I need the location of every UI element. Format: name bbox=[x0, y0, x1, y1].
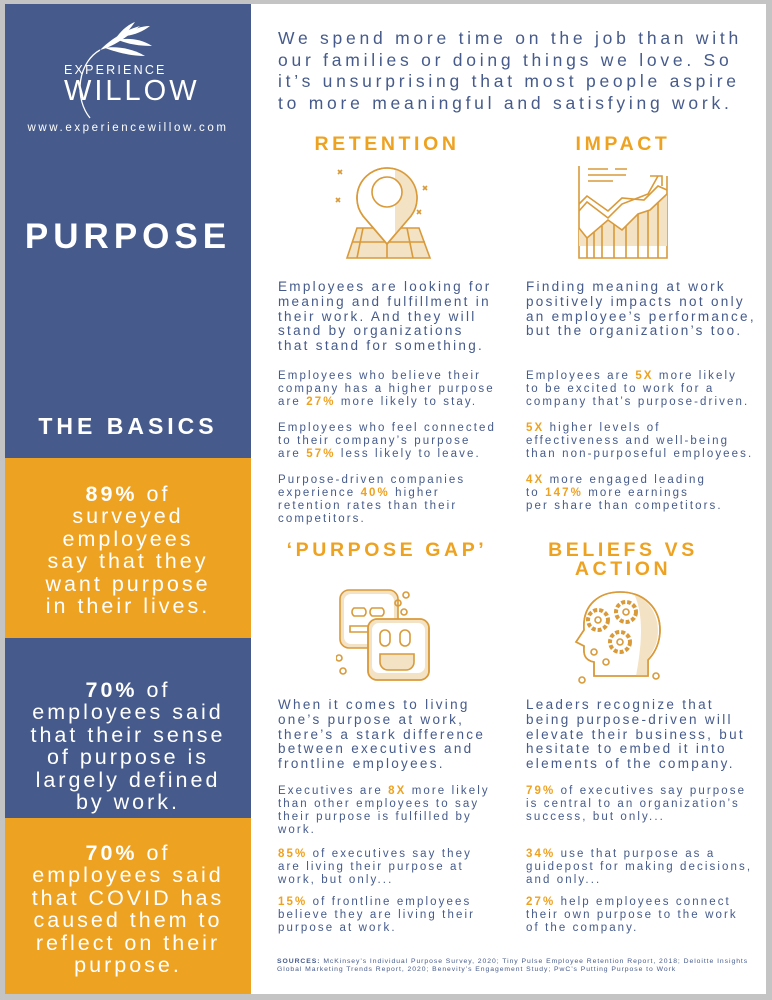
stats: gap: work. bbox=[278, 824, 316, 836]
text: gap intro: When it comes to living bbox=[278, 697, 470, 712]
text: impact intro: Finding meaning at work bbox=[526, 279, 726, 294]
panel: stat 70% work: largely defined bbox=[36, 768, 220, 792]
text: 85% of executives say they bbox=[278, 848, 472, 860]
text: than non-purposeful employees. bbox=[526, 448, 753, 460]
text: 34% use that purpose as a bbox=[526, 848, 715, 860]
stats: impact: to be excited to work for a bbox=[526, 383, 714, 395]
panel: stat 70% work: by work. bbox=[76, 790, 180, 814]
text: impact intro: an employee’s performance, bbox=[526, 309, 756, 324]
stats: retention: Employees who believe their bbox=[278, 370, 481, 382]
icon: map pin bbox=[336, 167, 432, 259]
text: WILLOW bbox=[64, 75, 200, 107]
icon: growth chart bbox=[578, 166, 668, 259]
icon: head with gears bbox=[574, 591, 661, 684]
text: retention intro: that stand for something. bbox=[278, 338, 484, 353]
text: gap intro: between executives and bbox=[278, 741, 473, 756]
stats: gap: than other employees to say bbox=[278, 798, 479, 810]
text: 15% of frontline employees bbox=[278, 896, 471, 908]
panel: stat 70% work bbox=[5, 638, 251, 818]
text: their own purpose to the work bbox=[526, 909, 738, 921]
text: experience 40% higher bbox=[278, 487, 440, 499]
text: retention intro bbox=[278, 279, 492, 353]
text: beliefs intro: hesitate to embed it into bbox=[526, 741, 727, 756]
text: impact intro: but the organization’s too. bbox=[526, 323, 742, 338]
intro text: to more meaningful and satisfying work. bbox=[278, 92, 733, 112]
text: are living their purpose at bbox=[278, 861, 464, 873]
text: impact intro: positively impacts not only bbox=[526, 294, 745, 309]
text: Employees who feel connected bbox=[278, 422, 496, 434]
text: work, but only... bbox=[278, 874, 393, 886]
text: beliefs intro: elevate their business, but bbox=[526, 727, 745, 742]
text: 4X more engaged leading bbox=[526, 474, 706, 486]
text: beliefs intro: elements of the company. bbox=[526, 756, 735, 771]
panel: stat 70% covid: that COVID has bbox=[32, 886, 224, 910]
text: believe they are living their bbox=[278, 909, 475, 921]
stats: retention: company has a higher purpose bbox=[278, 383, 495, 395]
panel: stat 70% covid: caused them to bbox=[33, 908, 222, 932]
text: gap intro: one’s purpose at work, bbox=[278, 712, 464, 727]
stats: beliefs: success, but only... bbox=[526, 811, 665, 823]
text: logo wordmark: EXPERIENCE bbox=[64, 63, 167, 77]
panel: stat 89%: employees bbox=[62, 527, 193, 551]
stats: gap: Executives are 8X more likely bbox=[278, 785, 490, 797]
panel: stat 70% work: employees said bbox=[32, 700, 224, 724]
left sidebar bbox=[5, 4, 251, 458]
text: beliefs intro: Leaders recognize that bbox=[526, 697, 714, 712]
text: impact intro bbox=[526, 279, 756, 338]
stats: beliefs: is central to an organization’s bbox=[526, 798, 740, 810]
text: gap intro: there’s a stark difference bbox=[278, 727, 485, 742]
stats: impact: Employees are 5X more likely bbox=[526, 370, 737, 382]
text: effectiveness and well-being bbox=[526, 435, 729, 447]
text: and only... bbox=[526, 874, 601, 886]
text: sources: Global Marketing Trends Report, 2020; Benevity’s Engagement Study; PwC’s Putting Purpose to Work bbox=[277, 966, 676, 973]
stats: beliefs bbox=[526, 785, 746, 823]
text: retention rates than their bbox=[278, 500, 457, 512]
heading: the basics: THE BASICS bbox=[38, 413, 218, 439]
panel: logo block bbox=[5, 4, 251, 458]
text: sources: SOURCES: McKinsey’s Individual Purpose Survey, 2020; Tiny Pulse Employee Retention Report, 2018; Deloitte Insights bbox=[277, 958, 748, 965]
panel: stat 70% covid bbox=[5, 818, 251, 994]
text: gap intro bbox=[278, 697, 485, 771]
panel: stat 70% covid: purpose. bbox=[74, 953, 182, 977]
text: of the company. bbox=[526, 922, 638, 934]
text: to their company’s purpose bbox=[278, 435, 470, 447]
text: 27% help employees connect bbox=[526, 896, 731, 908]
intro text: our families or doing things we love. So bbox=[278, 50, 732, 70]
heading: purpose gap: ‘PURPOSE GAP’ bbox=[287, 539, 487, 561]
stats: impact bbox=[526, 370, 749, 408]
stats: beliefs: 79% of executives say purpose bbox=[526, 785, 746, 797]
icon: willow logo bbox=[79, 22, 152, 118]
text: sources bbox=[277, 958, 748, 973]
text: retention intro: their work. And they will bbox=[278, 309, 477, 324]
heading: beliefs vs action: ACTION bbox=[575, 558, 671, 580]
stats: impact: company that’s purpose-driven. bbox=[526, 396, 749, 408]
text: competitors. bbox=[278, 513, 366, 525]
stats: retention bbox=[278, 370, 495, 408]
intro text: We spend more time on the job than with bbox=[278, 28, 742, 48]
panel: stat 70% work: 70% of bbox=[86, 678, 170, 702]
icon: two faces bbox=[336, 589, 430, 681]
text: to 147% more earnings bbox=[526, 487, 689, 499]
text: Purpose-driven companies bbox=[278, 474, 465, 486]
text: guidepost for making decisions, bbox=[526, 861, 752, 873]
stats: gap bbox=[278, 785, 490, 836]
panel: stat 89%: 89% of bbox=[86, 482, 170, 506]
panel: stat 89%: in their lives. bbox=[46, 594, 210, 618]
panel: stat 89%: say that they bbox=[48, 549, 208, 573]
panel: stat 70% work: of purpose is bbox=[47, 745, 209, 769]
panel: stat 89% bbox=[5, 458, 251, 638]
stats: gap: their purpose is fulfilled by bbox=[278, 811, 472, 823]
text: per share than competitors. bbox=[526, 500, 723, 512]
text: retention intro: stand by organizations bbox=[278, 323, 464, 338]
panel: stat 70% work: that their sense bbox=[30, 723, 226, 747]
heading: beliefs vs action bbox=[548, 539, 698, 580]
panel: stat 70% covid: reflect on their bbox=[36, 931, 220, 955]
text: retention intro: Employees are looking for bbox=[278, 279, 492, 294]
text: gap intro: frontline employees. bbox=[278, 756, 445, 771]
text: 5X higher levels of bbox=[526, 422, 661, 434]
text: beliefs intro bbox=[526, 697, 745, 771]
text: purpose at work. bbox=[278, 922, 397, 934]
panel: stat 89%: surveyed bbox=[72, 504, 184, 528]
panel: stat 89%: want purpose bbox=[45, 572, 211, 596]
stats: retention: are 27% more likely to stay. bbox=[278, 396, 477, 408]
text: website: www.experiencewillow.com bbox=[27, 122, 229, 134]
text: retention intro: meaning and fulfillment in bbox=[278, 294, 491, 309]
heading: purpose: PURPOSE bbox=[25, 217, 231, 256]
heading: beliefs vs action: BELIEFS VS bbox=[548, 539, 698, 561]
heading: impact: IMPACT bbox=[576, 133, 670, 155]
text: are 57% less likely to leave. bbox=[278, 448, 481, 460]
text: beliefs intro: being purpose-driven will bbox=[526, 712, 733, 727]
intro text: it’s unsurprising that most people aspire bbox=[278, 71, 740, 91]
intro text bbox=[278, 28, 742, 112]
panel: stat 70% covid: 70% of bbox=[86, 841, 170, 865]
panel: stat 70% covid: employees said bbox=[32, 863, 224, 887]
heading: retention: RETENTION bbox=[314, 133, 460, 155]
